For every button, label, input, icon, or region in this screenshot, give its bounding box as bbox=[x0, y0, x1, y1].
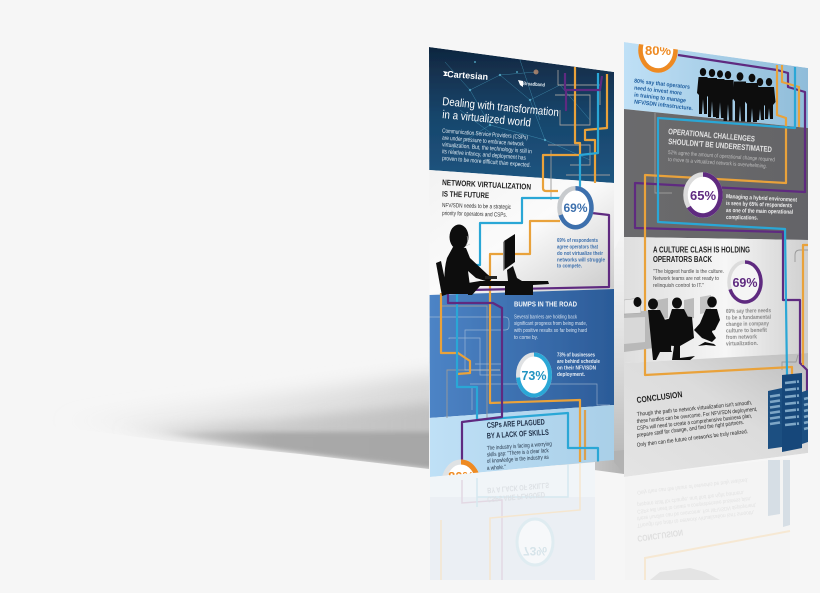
heading: network virtualization: NETWORK VIRTUALIZATION bbox=[442, 178, 531, 192]
text: conclusion body: CSPs will need to create a comprehensive business plan, bbox=[637, 413, 753, 432]
text: 69% explanation: 69% of respondents bbox=[557, 238, 598, 244]
reflected heading: CSPs ARE PLAGUED bbox=[487, 490, 546, 504]
text: 73% explanation: are behind schedule bbox=[557, 359, 601, 365]
heading: CSPs lack of skills: BY A LACK OF SKILLS bbox=[487, 428, 549, 440]
heading: network virtualization bbox=[442, 180, 531, 198]
chart: 80% donut bbox=[638, 44, 678, 73]
chart: 65% donut bbox=[686, 174, 720, 216]
text: skills gap: a whole." bbox=[487, 465, 506, 472]
text: barriers: Several barriers are holding back bbox=[514, 314, 577, 320]
text: 69% explanation: to compete. bbox=[557, 264, 582, 270]
panel: left infographic page bbox=[429, 47, 614, 504]
intro text: Communication Service Providers (CSPs) bbox=[442, 129, 528, 141]
text: operational change bbox=[668, 150, 775, 170]
text: conclusion body: Only then can the future of networks be truly realized. bbox=[637, 429, 749, 449]
reflection: left panel bbox=[430, 462, 595, 580]
reflection: right panel: Only then can the future of networks be truly realized. bbox=[637, 476, 749, 495]
text: 80% explanation bbox=[634, 79, 693, 112]
text: 69% explanation: networks will struggle bbox=[557, 257, 606, 263]
section: dark header background bbox=[429, 47, 614, 183]
text: culture quote: relinquish control to IT." bbox=[653, 283, 704, 289]
chart: 80% donut clipped bbox=[442, 460, 478, 476]
text: conclusion body: these hurdles can be overcome. For NFV/SDN deployment, bbox=[637, 407, 758, 425]
circuit line: orange lower bbox=[490, 221, 580, 462]
text: conclusion body bbox=[637, 400, 758, 449]
heading: CSPs lack of skills bbox=[487, 419, 549, 438]
heading: operational challenges: SHOULDN'T BE UNDERESTIMATED bbox=[668, 137, 772, 154]
reflection: right panel: these hurdles can be overcome. For NFV/SDN deployment, bbox=[637, 501, 757, 521]
section: skills background bbox=[429, 405, 614, 477]
reflection: right panel bbox=[625, 458, 790, 580]
circuit thin lines right bbox=[655, 113, 808, 370]
reflection: left panel: 73% bbox=[523, 544, 547, 558]
chart: 73% donut bbox=[518, 354, 550, 396]
section: training background bbox=[624, 42, 808, 128]
heading: operational challenges: OPERATIONAL CHALLENGES bbox=[668, 127, 756, 144]
text: operational change: 52% agree the amount of operational change required bbox=[668, 150, 775, 163]
section: culture clash background bbox=[624, 237, 808, 363]
circuit line: orange right page bbox=[645, 65, 792, 375]
heading: operational challenges bbox=[668, 127, 772, 154]
text: 80% explanation: 80% say that operators bbox=[634, 79, 690, 91]
logo: Broadband: Broadband bbox=[523, 81, 545, 89]
text: skills gap bbox=[487, 441, 552, 472]
text: 73% explanation: on their NFV/SDN bbox=[557, 366, 596, 372]
text: skills gap: of knowledge in the industry as bbox=[487, 455, 549, 465]
icon: meeting room silhouettes bbox=[624, 295, 720, 360]
text: barriers: with positive results so far being hard bbox=[513, 328, 587, 334]
text: culture quote: "The biggest hurdle is the culture. bbox=[653, 269, 724, 275]
text: culture change: culture to benefit bbox=[726, 328, 767, 334]
circuit line: purple bbox=[565, 73, 602, 110]
heading: CSPs lack of skills: CSPs ARE PLAGUED bbox=[487, 417, 545, 430]
text: hybrid environment: Managing a hybrid environment bbox=[726, 194, 797, 204]
circuit line: cyan bbox=[580, 73, 598, 192]
shadow gap between panels bbox=[520, 230, 624, 474]
chart: 69% donut bbox=[729, 262, 761, 302]
circuit line: orange right bbox=[585, 74, 607, 183]
reflected conclusion: CONCLUSION bbox=[637, 528, 684, 544]
intro text: its relative infancy, and deployment has bbox=[442, 149, 526, 162]
chart: 80% donut clipped: 80% bbox=[448, 469, 474, 484]
heading: bumps in the road: BUMPS IN THE ROAD bbox=[514, 300, 577, 308]
section: conclusion background bbox=[624, 353, 808, 477]
text: skills gap: skills gap: "There is a clear lack bbox=[487, 448, 549, 458]
section: operational challenges background bbox=[624, 109, 808, 240]
text: hybrid environment: complications. bbox=[726, 215, 758, 222]
text: 69% explanation bbox=[557, 238, 606, 270]
text: culture change bbox=[726, 308, 771, 347]
text: culture change: virtualization. bbox=[726, 341, 758, 347]
text: 73% explanation: 73% of businesses bbox=[557, 353, 595, 359]
text: operational change: to move to a virtualized network is overwhelming. bbox=[668, 157, 767, 170]
heading: culture clash: OPERATORS BACK bbox=[653, 255, 712, 264]
text: 80% explanation: in training to manage bbox=[634, 93, 687, 104]
text: skills gap: The industry is facing a worrying bbox=[487, 441, 552, 452]
text: hybrid environment: is seen by 65% of respondents bbox=[726, 201, 792, 209]
intro text: are under pressure to embrace network bbox=[442, 136, 525, 148]
panel: right infographic page bbox=[624, 29, 808, 477]
chart: 80% donut: 80% bbox=[645, 43, 671, 58]
heading: conclusion: CONCLUSION bbox=[636, 389, 683, 405]
reflection: right panel: CSPs will need to create a comprehensive business plan, bbox=[637, 495, 752, 514]
network starfield bbox=[445, 60, 590, 160]
reflection: right panel: Though the path to network virtualization isn't smooth, bbox=[637, 509, 755, 528]
reflection: right panel: prepare staff for change, and find the right partners. bbox=[637, 489, 745, 507]
text: 73% explanation bbox=[557, 353, 601, 378]
icon: server racks bbox=[768, 373, 808, 452]
chart: 69% donut bbox=[560, 188, 592, 227]
logo: Cartesian bbox=[443, 71, 488, 80]
text: strategic priority: NFV/SDN needs to be a strategic bbox=[442, 203, 511, 211]
circuit line: purple right bbox=[635, 55, 807, 393]
section: bumps in the road background bbox=[429, 289, 614, 418]
intro text bbox=[442, 129, 532, 169]
icon: person at computer desk bbox=[436, 224, 549, 296]
circuit line: cyan right page bbox=[658, 67, 795, 375]
circuit line: orange bbox=[543, 67, 580, 191]
text: barriers bbox=[513, 314, 587, 341]
text: hybrid environment bbox=[726, 194, 797, 222]
text: culture change: from network bbox=[726, 334, 758, 341]
heading: culture clash: A CULTURE CLASH IS HOLDING bbox=[653, 246, 750, 254]
intro text: proven to be more difficult than expected. bbox=[442, 156, 531, 169]
text: strategic priority bbox=[442, 203, 511, 219]
heading: network virtualization: IS THE FUTURE bbox=[442, 190, 490, 200]
text: 69% explanation: agree operators that bbox=[557, 245, 598, 251]
text: conclusion body: prepare staff for change, and find the right partners. bbox=[637, 420, 745, 439]
text: culture quote: Network teams are not ready to bbox=[653, 276, 720, 282]
text: 69% explanation: do not virtualize their bbox=[557, 251, 604, 257]
text: barriers: significant progress from being made, bbox=[514, 321, 587, 327]
text: strategic priority: priority for operators and CSPs. bbox=[442, 211, 507, 219]
chart: 69% donut: 69% bbox=[732, 276, 758, 290]
text: barriers: to come by. bbox=[514, 335, 538, 341]
text: hybrid environment: as one of the main operational bbox=[726, 208, 793, 216]
text: culture change: 69% say there needs bbox=[726, 308, 771, 315]
text: culture change: to be a fundamental bbox=[726, 315, 771, 321]
title: in a virtualized world bbox=[442, 109, 531, 130]
text: 73% explanation: deployment. bbox=[557, 372, 585, 378]
text: 80% explanation: NFV/SDN infrastructure. bbox=[634, 100, 693, 112]
chart: 65% donut: 65% bbox=[690, 188, 716, 203]
circuit thin lines bbox=[429, 70, 610, 418]
text: conclusion body: Though the path to network virtualization isn't smooth, bbox=[637, 400, 753, 418]
icon: group of people silhouettes bbox=[697, 68, 776, 122]
title: Dealing with transformation bbox=[442, 96, 559, 119]
intro text: virtualization. But, the technology is still in bbox=[442, 142, 532, 155]
logo: Cartesian: Cartesian bbox=[447, 69, 488, 82]
title bbox=[442, 97, 558, 126]
chart: 69% donut: 69% bbox=[563, 201, 588, 215]
section: network virtualization background bbox=[429, 170, 614, 295]
cast shadow on floor bbox=[136, 369, 429, 469]
heading: culture clash bbox=[653, 246, 750, 264]
text: culture change: change in company bbox=[726, 321, 770, 328]
text: culture quote bbox=[653, 269, 724, 289]
reflection: left panel: BY A LACK OF SKILLS bbox=[487, 481, 549, 495]
text: 80% explanation: need to invest more bbox=[634, 86, 683, 97]
chart: 73% donut: 73% bbox=[521, 369, 547, 383]
logo: Broadband bbox=[518, 80, 545, 87]
